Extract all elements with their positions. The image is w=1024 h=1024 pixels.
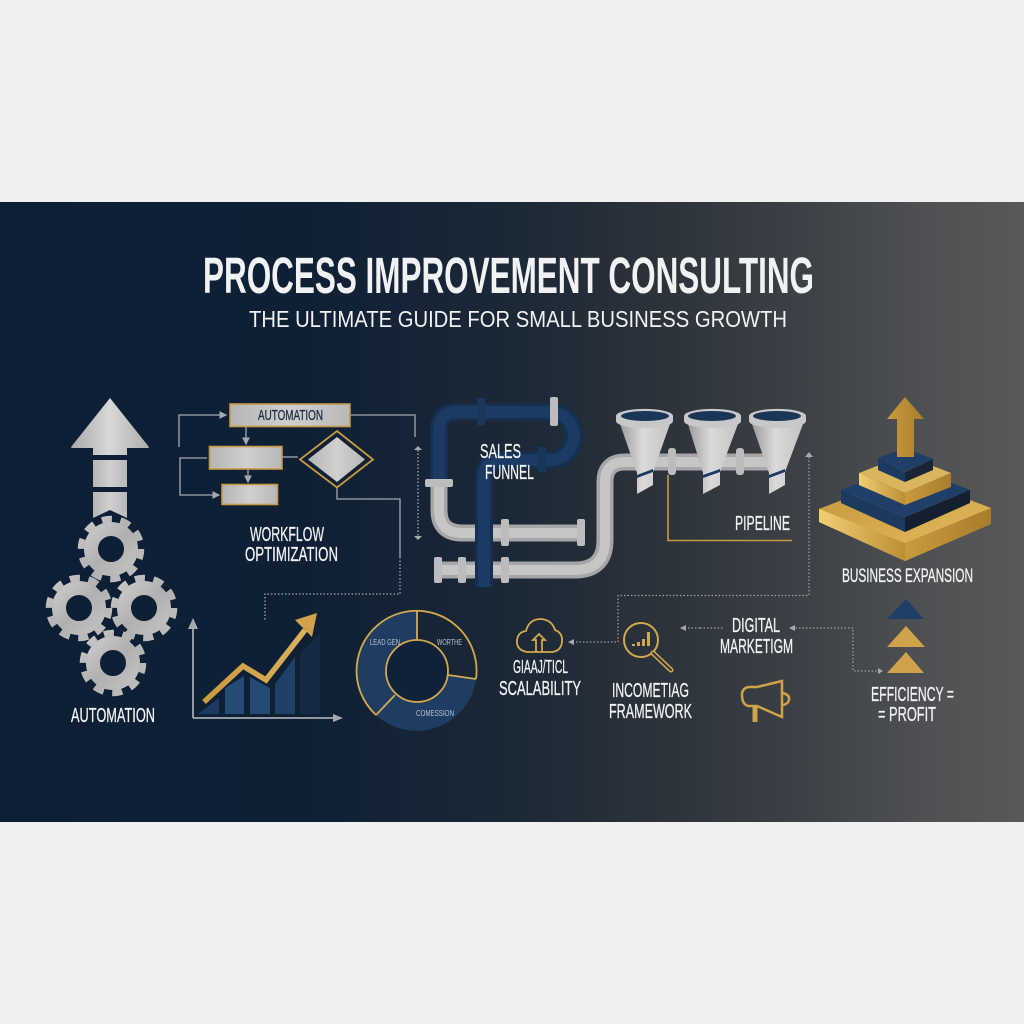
label: sales funnel (480, 441, 534, 484)
icon: silver upward arrow (71, 398, 149, 518)
donut chart (357, 611, 477, 731)
funnel 3 (749, 409, 806, 494)
label: workflow optimization (245, 524, 338, 566)
label: workflow optimization: WORKFLOW (250, 524, 324, 546)
label: efficiency equals profit: = PROFIT (878, 704, 936, 726)
icon: navy triangle (887, 599, 924, 619)
donut chart: COMESSION (416, 708, 454, 718)
label: pipeline with gold leader (668, 475, 792, 540)
label: pipeline with gold leader: PIPELINE (735, 513, 790, 535)
icon: magnifier with bars (624, 623, 671, 670)
donut chart: WORTHE (437, 637, 462, 647)
banner panel (0, 202, 1024, 822)
flow decision diamond (300, 431, 373, 488)
label: framework (609, 680, 692, 723)
subtitle: THE ULTIMATE GUIDE FOR SMALL BUSINESS GROWTH (249, 306, 787, 332)
label: automation: AUTOMATION (71, 705, 155, 727)
label: sales funnel: FUNNEL (485, 462, 534, 484)
pipeline: silver pipes (425, 397, 768, 583)
label: scalability: GIAAJ/TICL (513, 657, 568, 677)
growth chart (188, 613, 343, 722)
label: digital marketing (720, 615, 793, 658)
icon: gear cluster (50, 520, 174, 692)
label: digital marketing: DIGITAL (732, 615, 780, 637)
label: digital marketing: MARKETIGM (720, 636, 793, 658)
funnel 1 (616, 409, 673, 494)
label: scalability: SCALABILITY (499, 678, 581, 700)
icon: cloud upload (517, 619, 562, 652)
dotted connectors (572, 457, 878, 671)
donut chart: LEAD GEN (370, 637, 400, 647)
label: framework: FRAMEWORK (609, 701, 692, 723)
icon: gold triangle upper (887, 626, 925, 647)
connector arrowheads (568, 452, 883, 674)
label: workflow optimization: OPTIMIZATION (245, 544, 338, 566)
icon: stepped pyramid with arrow (819, 397, 991, 561)
label: efficiency equals profit (871, 684, 954, 726)
pipeline: navy pipe (439, 398, 574, 587)
icon: gold triangle lower (887, 652, 924, 673)
flow box: automation: AUTOMATION (258, 407, 323, 424)
icon: megaphone (742, 681, 789, 722)
flow box: automation (230, 404, 350, 426)
label: framework: INCOMETIAG (612, 680, 689, 702)
label: scalability (499, 657, 581, 700)
flow box: middle (210, 446, 282, 469)
flowchart (179, 404, 422, 620)
label: sales funnel: SALES (480, 441, 521, 463)
label: efficiency equals profit: EFFICIENCY = (871, 684, 954, 706)
flow box: lower (222, 484, 278, 504)
funnel 2 (684, 409, 741, 494)
